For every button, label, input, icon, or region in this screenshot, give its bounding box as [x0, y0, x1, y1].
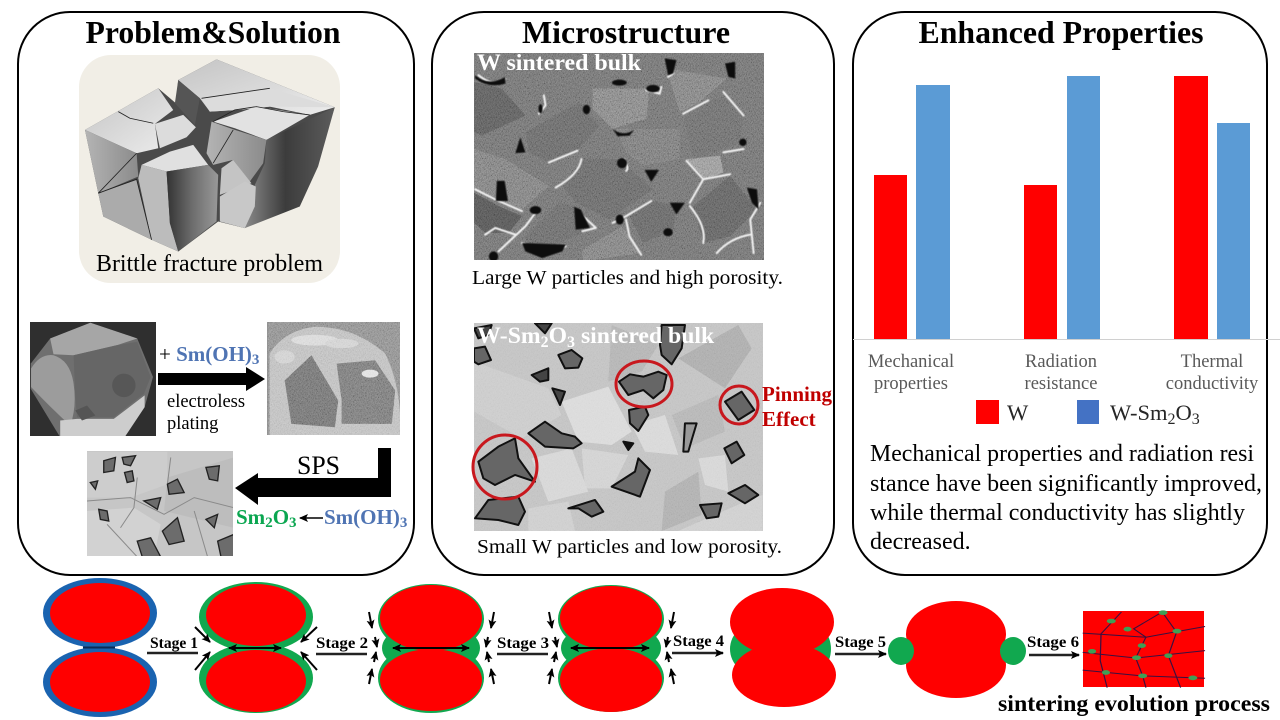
- legend: W: [1007, 400, 1029, 425]
- text: plus Sm(OH)3: 3: [252, 352, 259, 368]
- legend: O: [1176, 400, 1192, 425]
- axis labels: properties: [874, 374, 948, 394]
- particles: stage 4: [730, 588, 836, 707]
- text: Sm2O3 from Sm(OH)3: 2: [265, 515, 273, 531]
- arrow: electroless plating: [158, 367, 265, 391]
- particles: initial coated pair: [43, 578, 157, 717]
- axis labels: Thermal: [1181, 352, 1243, 372]
- arrow: stage 5: Stage 5: [835, 634, 886, 651]
- image: W sintered bulk SEM: [474, 50, 766, 261]
- text: plus Sm(OH)3: + Sm(OH): [159, 342, 252, 366]
- text: electroless plating: plating: [167, 414, 218, 434]
- caption: sintering evolution process: sintering evolution process: [998, 691, 1270, 716]
- legend: 2: [1168, 411, 1176, 428]
- text: conclusion paragraph: while thermal conductivity has slightly: [870, 500, 1245, 526]
- particles: stage 1: [195, 582, 317, 713]
- text: Sm2O3 from Sm(OH)3: Sm: [236, 505, 265, 529]
- text: conclusion paragraph: decreased.: [870, 529, 971, 555]
- text: Sm2O3 from Sm(OH)3: 3: [289, 515, 297, 531]
- axis labels: Radiation: [1025, 352, 1097, 372]
- text: Sm2O3 from Sm(OH)3: 3: [400, 515, 407, 531]
- label: pinning effect: Pinning: [762, 382, 833, 406]
- axis labels: [868, 352, 1259, 394]
- callout: pinning effect circles: [473, 361, 758, 499]
- text: electroless plating: electroless: [167, 392, 245, 412]
- diagram: sintering evolution process: [43, 578, 1270, 717]
- caption: small W particles: Small W particles and low porosity.: [477, 536, 782, 558]
- arrow: SPS bent arrow: [235, 448, 391, 505]
- arrow: stage 3: Stage 3: [497, 635, 549, 652]
- label: W-Sm2O3 sintered bulk: 3: [567, 334, 575, 351]
- panel: microstructure: [432, 12, 834, 575]
- legend: [976, 400, 1200, 428]
- arrow: stage 1: Stage 1: [150, 635, 198, 652]
- particles: stage 3: [549, 585, 674, 712]
- illustration: fractured cube: [79, 55, 340, 283]
- particles: stage 5: [888, 601, 1026, 698]
- text: Sm2O3 from Sm(OH)3: [236, 505, 407, 531]
- text: conclusion paragraph: stance have been significantly improved,: [870, 471, 1262, 497]
- label: W-Sm2O3 sintered bulk: O: [549, 323, 567, 349]
- image: sintered grain network: [1083, 610, 1205, 688]
- panel: problem and solution: [18, 12, 414, 575]
- text: Sm2O3 from Sm(OH)3: Sm(OH): [324, 505, 400, 529]
- arrow: stage 2: Stage 2: [316, 635, 368, 652]
- axis labels: conductivity: [1166, 374, 1259, 394]
- text: conclusion paragraph: Mechanical properties and radiation resi: [870, 441, 1254, 467]
- heading: Microstructure: Microstructure: [522, 14, 730, 50]
- legend: 3: [1192, 411, 1200, 428]
- axis labels: resistance: [1025, 374, 1097, 394]
- arrow: stage 4: Stage 4: [673, 633, 724, 650]
- label: W-Sm2O3 sintered bulk: W-Sm: [477, 323, 541, 349]
- bar chart: [853, 76, 1280, 394]
- label: W sintered bulk: W sintered bulk: [477, 50, 641, 75]
- text: SPS: SPS: [297, 451, 340, 480]
- image: coated particle: [267, 322, 402, 436]
- caption: large W particles: Large W particles and high porosity.: [472, 267, 783, 289]
- heading: Enhanced Properties: Enhanced Properties: [918, 14, 1204, 50]
- label: W-Sm2O3 sintered bulk: sintered bulk: [575, 323, 715, 349]
- heading: Problem&Solution: Problem&Solution: [86, 14, 341, 50]
- arrow: stage 6: Stage 6: [1027, 634, 1079, 651]
- label: W-Sm2O3 sintered bulk: 2: [541, 334, 549, 351]
- panel: enhanced properties: [853, 12, 1280, 575]
- image: sintered bulk thumbnail: [87, 451, 234, 557]
- axis labels: Mechanical: [868, 352, 954, 372]
- label: pinning effect: Effect: [762, 407, 816, 431]
- caption: brittle fracture problem: Brittle fracture problem: [96, 251, 323, 277]
- legend: W-Sm: [1110, 400, 1168, 425]
- image: tungsten particle: [30, 322, 156, 437]
- particles: stage 2: [369, 584, 494, 713]
- text: Sm2O3 from Sm(OH)3: O: [273, 505, 289, 529]
- image: W-Sm2O3 sintered bulk SEM: [474, 323, 763, 531]
